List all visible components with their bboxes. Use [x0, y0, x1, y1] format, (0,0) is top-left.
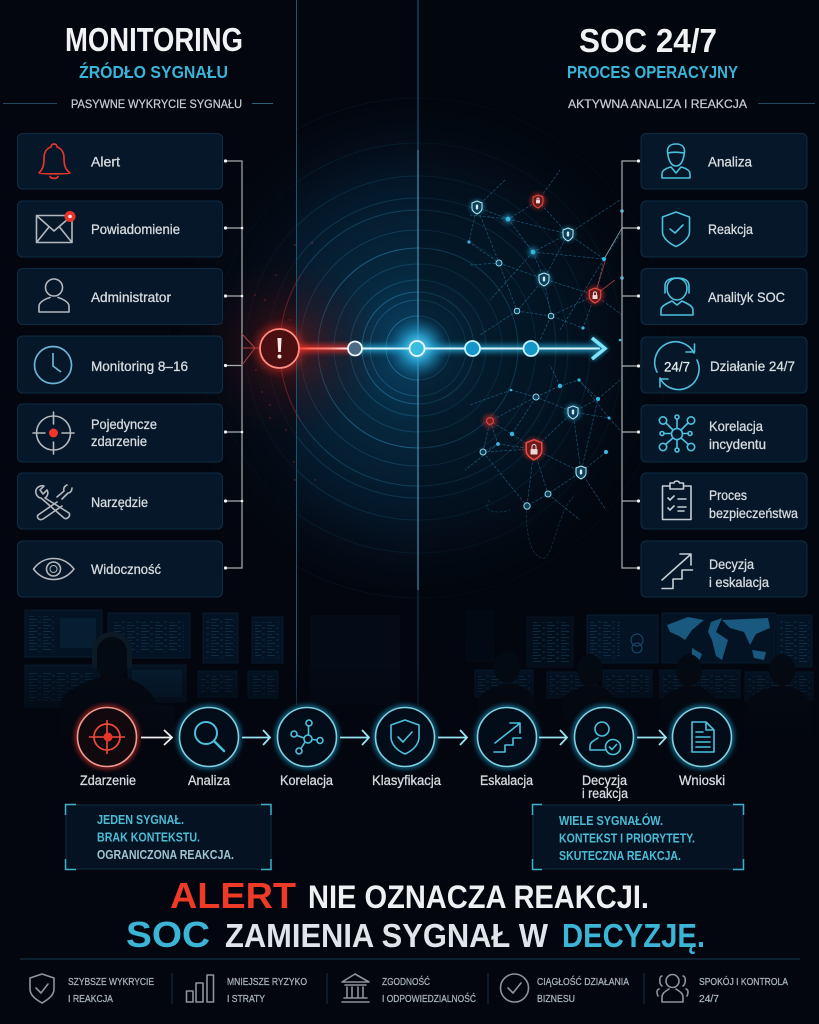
- panel: monitoring cards: [18, 134, 222, 597]
- headline: ZAMIENIA SYGNAŁ W: [225, 917, 549, 954]
- card: Narzędzie: Narzędzie: [91, 494, 148, 510]
- step: Zdarzenie: [78, 708, 136, 788]
- step: Decyzja i reakcja: [574, 708, 634, 801]
- radar rings: [168, 98, 668, 598]
- world map: [667, 617, 770, 663]
- right connector bracket: [622, 159, 640, 570]
- benefit: continuity: [500, 974, 629, 1005]
- card: Powiadomienie: [18, 201, 222, 257]
- process flow: [77, 707, 732, 801]
- card: Proces bezpieczeństwa: [641, 473, 807, 529]
- card: Reakcja: Reakcja: [708, 221, 753, 237]
- header: Monitoring: ŹRÓDŁO SYGNAŁU: [79, 61, 228, 82]
- card: Pojedyncze zdarzenie: zdarzenie: [91, 433, 147, 449]
- card: Widoczność: [18, 541, 222, 597]
- headline: [126, 875, 705, 955]
- card: Działanie 24/7: [641, 337, 807, 393]
- header: SOC 24/7: SOC 24/7: [579, 23, 717, 60]
- arrow: [637, 730, 666, 745]
- headline: NIE OZNACZA REAKCJI.: [308, 879, 649, 915]
- control room left: [25, 610, 400, 745]
- step: Analiza: [180, 708, 238, 788]
- header: SOC 24/7: PROCES OPERACYJNY: [567, 62, 738, 82]
- benefit: compliance: [342, 974, 476, 1005]
- benefit: peace of mind: [657, 974, 788, 1005]
- card: Proces bezpieczeństwa: bezpieczeństwa: [709, 505, 798, 521]
- step: Eskalacja: Eskalacja: [480, 773, 533, 788]
- control room right: [467, 611, 813, 740]
- operator silhouette: [60, 632, 172, 745]
- panel: SOC cards: [641, 134, 807, 597]
- arrow head: [592, 338, 605, 359]
- card: Korelacja incydentu: [641, 405, 807, 462]
- card: Działanie 24/7: Działanie 24/7: [710, 358, 795, 374]
- step: Wnioski: Wnioski: [679, 773, 725, 788]
- header: Monitoring: MONITORING: [65, 22, 243, 59]
- card: Monitoring 8-16: Monitoring 8–16: [91, 358, 188, 374]
- header: Monitoring: PASYWNE WYKRYCIE SYGNAŁU: [71, 97, 242, 111]
- step: Zdarzenie: Zdarzenie: [80, 773, 136, 788]
- benefit: compliance: I ODPOWIEDZIALNOŚĆ: [382, 992, 476, 1005]
- step: Analiza: Analiza: [188, 773, 230, 788]
- card: Pojedyncze zdarzenie: Pojedyncze: [91, 416, 157, 432]
- timeline nodes: [348, 341, 538, 356]
- step: Decyzja i reakcja: i reakcja: [582, 786, 628, 801]
- benefit: peace of mind: SPOKÓJ I KONTROLA: [699, 975, 788, 988]
- vertical divider lines: [296, 0, 418, 705]
- card: Analiza: [641, 134, 807, 189]
- card: Analiza: Analiza: [708, 154, 752, 170]
- arrow: [340, 730, 369, 745]
- benefit: peace of mind: 24/7: [699, 994, 719, 1005]
- benefit: faster detection: I REAKCJA: [68, 994, 113, 1005]
- callout: monitoring summary: [66, 804, 271, 870]
- headline: ALERT: [170, 875, 296, 916]
- step: Korelacja: [278, 708, 336, 788]
- card: Widoczność: Widoczność: [91, 561, 161, 577]
- benefit: lower risk: MNIEJSZE RYZYKO: [227, 977, 307, 988]
- card: Monitoring 8-16: [18, 336, 222, 393]
- step glows: [77, 707, 732, 767]
- card: Alert: [18, 134, 222, 189]
- operator silhouettes: [478, 651, 812, 740]
- red glow: [190, 250, 400, 450]
- card: Decyzja i eskalacja: Decyzja: [709, 556, 754, 572]
- card: Powiadomienie: Powiadomienie: [91, 221, 180, 237]
- callout: SOC summary: [532, 804, 744, 870]
- headline: DECYZJĘ.: [562, 917, 705, 954]
- card: Pojedyncze zdarzenie: [18, 404, 222, 462]
- callout: monitoring summary: JEDEN SYGNAŁ.: [97, 812, 184, 827]
- arrow: [242, 730, 270, 745]
- card: Reakcja: [641, 201, 807, 257]
- card: Narzędzie: [18, 473, 222, 529]
- card: Decyzja i eskalacja: i eskalacja: [709, 574, 769, 590]
- callout: monitoring summary: BRAK KONTEKSTU.: [97, 830, 200, 844]
- card: Działanie 24/7: 24/7: [664, 360, 690, 374]
- step: Eskalacja: [478, 708, 536, 788]
- signal timeline: [256, 316, 605, 380]
- headline: SOC: [126, 914, 210, 955]
- network map: [465, 170, 624, 558]
- card: Decyzja i eskalacja: [641, 541, 807, 597]
- callout: SOC summary: SKUTECZNA REAKCJA.: [559, 848, 681, 863]
- benefit: lower risk: I STRATY: [227, 994, 265, 1005]
- alert marker: [256, 324, 304, 372]
- card: Korelacja incydentu: incydentu: [709, 436, 766, 452]
- benefit: continuity: BIZNESU: [537, 994, 575, 1005]
- header: SOC 24/7: [567, 23, 815, 111]
- benefit: faster detection: [30, 974, 154, 1005]
- left connector bracket: [224, 159, 260, 570]
- arrow: [141, 730, 172, 745]
- step: Korelacja: Korelacja: [280, 773, 333, 788]
- step: Decyzja i reakcja: Decyzja: [582, 773, 627, 788]
- card: Administrator: Administrator: [91, 289, 171, 305]
- benefit: compliance: ZGODNOŚĆ: [382, 975, 430, 988]
- callout: monitoring summary: OGRANICZONA REAKCJA.: [97, 847, 234, 862]
- scene fade: [0, 660, 819, 750]
- card: Analityk SOC: [641, 268, 807, 324]
- callout: SOC summary: WIELE SYGNAŁÓW.: [559, 813, 663, 828]
- card: Proces bezpieczeństwa: Proces: [709, 487, 747, 503]
- header: Monitoring: [3, 22, 273, 111]
- step: Wnioski: [672, 708, 732, 788]
- benefit: lower risk: [186, 975, 307, 1005]
- arrow: [539, 730, 567, 745]
- arrow: [438, 730, 467, 745]
- header: SOC 24/7: AKTYWNA ANALIZA I REAKCJA: [568, 97, 748, 111]
- footer benefits: [30, 974, 788, 1005]
- side zones darkening: [0, 0, 819, 640]
- card: Korelacja incydentu: Korelacja: [709, 418, 763, 434]
- card: Analityk SOC: Analityk SOC: [708, 289, 785, 305]
- red signal arc and particles: [254, 242, 316, 481]
- step: Klasyfikacja: [372, 708, 441, 788]
- benefit: continuity: CIĄGŁOŚĆ DZIAŁANIA: [537, 975, 629, 988]
- card: Alert: Alert: [91, 154, 120, 170]
- callout: SOC summary: KONTEKST I PRIORYTETY.: [559, 830, 695, 846]
- card: Administrator: [18, 268, 222, 324]
- step: Klasyfikacja: Klasyfikacja: [372, 773, 441, 788]
- benefit: faster detection: SZYBSZE WYKRYCIE: [68, 977, 154, 988]
